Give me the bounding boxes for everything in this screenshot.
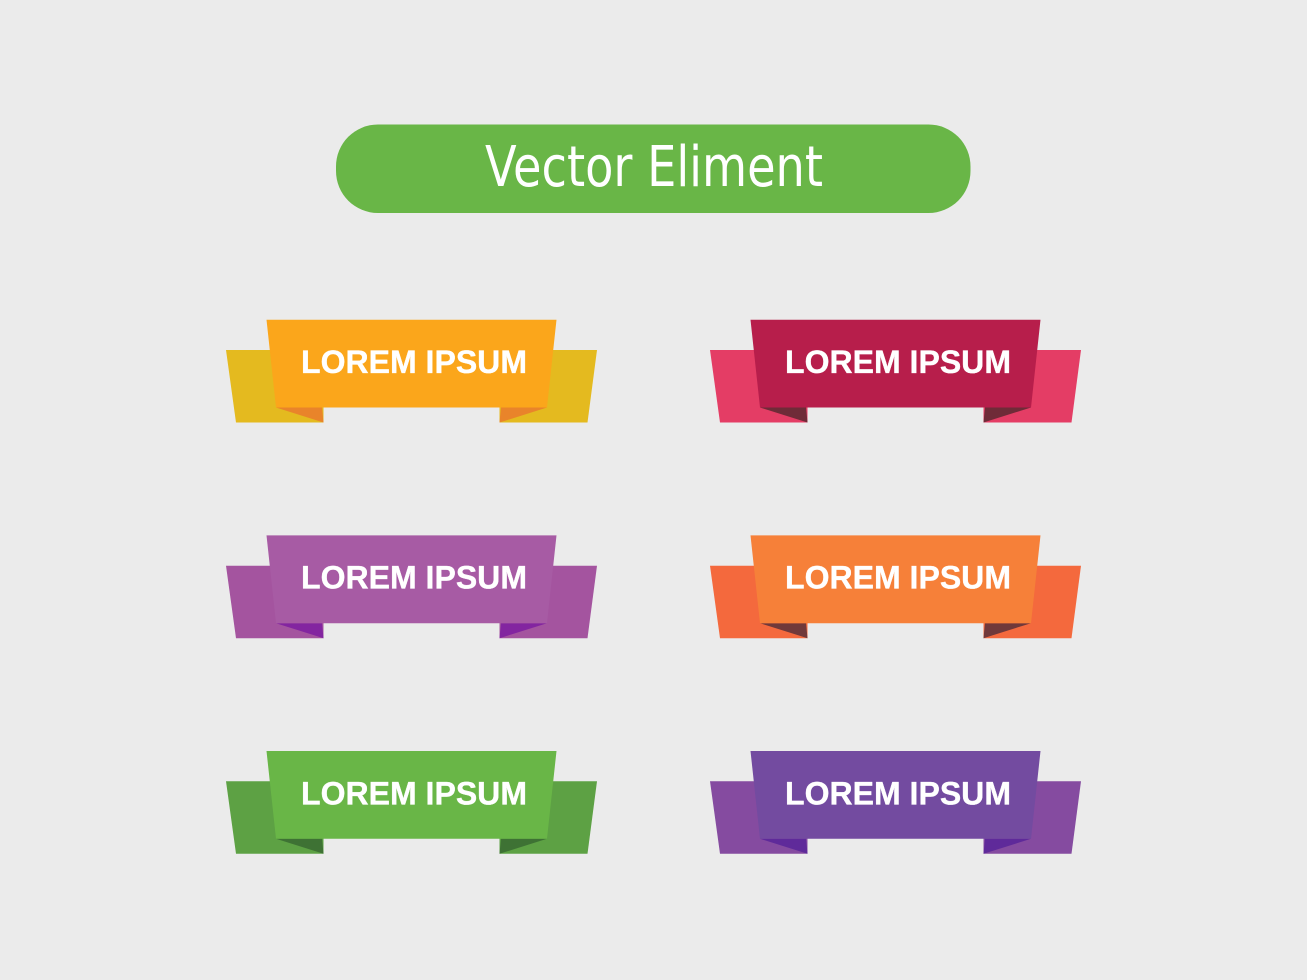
ribbon: crimson: LOREM IPSUM [785,344,1011,380]
title banner [336,124,970,213]
ribbon: orange: LOREM IPSUM [785,560,1011,596]
ribbon: violet: LOREM IPSUM [785,775,1011,811]
ribbon: yellow-orange: LOREM IPSUM [301,344,527,380]
ribbon: violet [710,751,1081,854]
ribbon: crimson [710,320,1081,423]
ribbon: light purple [226,535,597,639]
ribbon: light purple: LOREM IPSUM [301,560,527,596]
ribbon: green [226,751,597,854]
title text: Vector Eliment [485,135,823,200]
ribbon: green: LOREM IPSUM [301,775,527,811]
ribbon: yellow-orange [226,320,597,423]
ribbon: orange [710,535,1081,639]
